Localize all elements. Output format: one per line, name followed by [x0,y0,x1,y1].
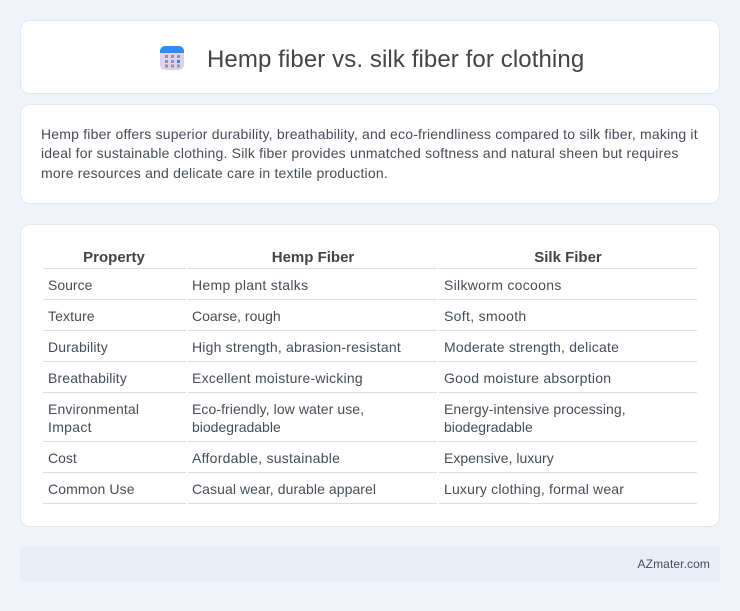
summary text: Hemp fiber offers superior durability, breathability, and eco-friendliness compared to silk fiber, making it [41,126,698,142]
row: durability: Durability [48,339,108,355]
row: durability: High strength, abrasion-resistant [192,339,401,355]
row: environmental impact: biodegradable [192,419,281,435]
row: source [48,277,562,293]
row: environmental impact: Eco-friendly, low water use, [192,401,364,417]
summary text: more resources and delicate care in textile production. [41,165,388,181]
row: breathability [48,370,611,386]
row: environmental impact: Impact [48,419,92,435]
row: environmental impact: biodegradable [444,419,533,435]
row: texture [48,308,527,324]
row: cost [48,450,554,466]
row: source: Hemp plant stalks [192,277,308,293]
row: environmental impact: Energy-intensive processing, [444,401,626,417]
icon: calendar [160,46,184,70]
summary text [41,126,698,181]
row: source: Source [48,277,92,293]
summary text: ideal for sustainable clothing. Silk fiber provides unmatched softness and natural sheen but requires [41,145,679,161]
footer credit: AZmater.com [638,557,710,571]
column headers: Hemp Fiber [272,249,354,266]
table card [20,224,720,527]
row: cost: Affordable, sustainable [192,450,340,466]
row: source: Silkworm cocoons [444,277,562,293]
column headers: Property [83,249,145,266]
title card [20,20,720,94]
row: cost: Cost [48,450,77,466]
row: breathability: Good moisture absorption [444,370,611,386]
summary card [20,104,720,204]
row: breathability: Breathability [48,370,127,386]
row: common use: Casual wear, durable apparel [192,481,376,497]
row: common use: Common Use [48,481,135,497]
row: durability [48,339,619,355]
row: texture: Soft, smooth [444,308,527,324]
row: durability: Moderate strength, delicate [444,339,619,355]
row: environmental impact [48,401,626,435]
footer bar [20,547,720,581]
row: cost: Expensive, luxury [444,450,554,466]
row: environmental impact: Environmental [48,401,139,417]
column headers: Silk Fiber [534,249,602,266]
row: texture: Texture [48,308,95,324]
row: breathability: Excellent moisture-wicking [192,370,363,386]
row: common use [48,481,624,497]
row: texture: Coarse, rough [192,308,281,324]
row: common use: Luxury clothing, formal wear [444,481,624,497]
column headers [83,249,602,266]
title: Hemp fiber vs. silk fiber for clothing [207,46,584,73]
